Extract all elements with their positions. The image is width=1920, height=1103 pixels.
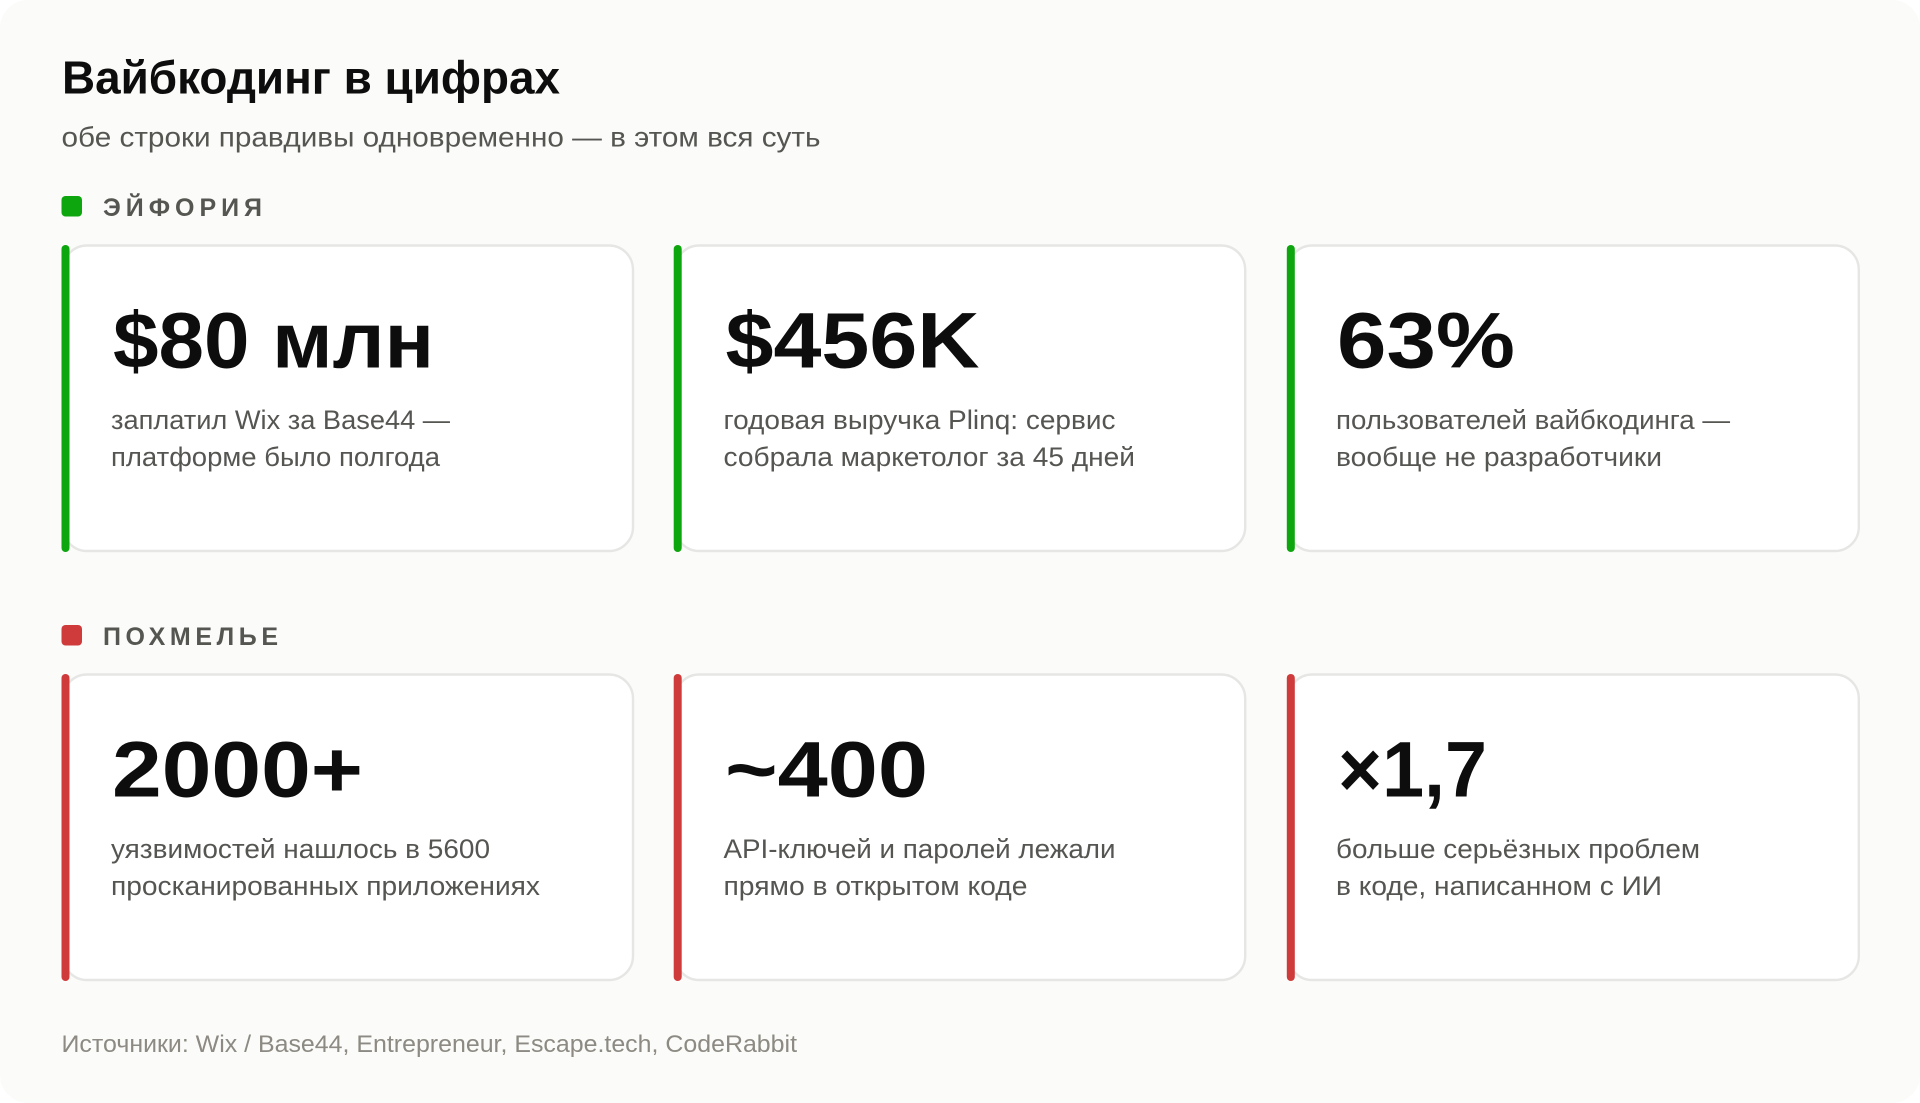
card: 2000+	[62, 674, 633, 981]
card: 63%	[1287, 245, 1859, 552]
card: $456K: собрала маркетолог за 45 дней	[724, 442, 1135, 472]
card: $80 million: платформе было полгода	[111, 442, 441, 472]
card: 63%: 63%	[1337, 296, 1515, 384]
section: hangover	[62, 623, 1859, 981]
card: $456K	[674, 245, 1245, 552]
card: ~400: прямо в открытом коде	[724, 871, 1028, 901]
section heading: euphoria: ЭЙФОРИЯ	[103, 192, 262, 222]
card: 2000+: просканированных приложениях	[111, 871, 541, 901]
card: 2000+: уязвимостей нашлось в 5600	[111, 834, 490, 864]
subtitle: обе строки правдивы одновременно — в этом вся суть	[62, 122, 820, 152]
card: ~400: ~400	[725, 724, 928, 814]
card: 63%: вообще не разработчики	[1336, 442, 1662, 472]
card: $80 million	[62, 245, 633, 552]
card: ~400: API-ключей и паролей лежали	[724, 834, 1116, 864]
sources footnote: Источники: Wix / Base44, Entrepreneur, Escape.tech, CodeRabbit	[62, 1031, 797, 1058]
card: $80 million: заплатил Wix за Base44 —	[111, 405, 450, 435]
card: $80 million: $80 млн	[113, 296, 434, 384]
card: ~400	[674, 674, 1245, 981]
icon: red square	[62, 625, 82, 646]
section heading: hangover: ПОХМЕЛЬЕ	[103, 623, 278, 651]
title: Вайбкодинг в цифрах	[62, 52, 560, 104]
card: x1.7	[1287, 674, 1859, 981]
card: x1.7: в коде, написанном с ИИ	[1336, 871, 1662, 901]
card: x1.7: ×1,7	[1338, 724, 1487, 814]
card: 2000+: 2000+	[112, 724, 363, 814]
section: euphoria	[62, 192, 1859, 552]
card: 63%: пользователей вайбкодинга —	[1336, 405, 1730, 435]
card: $456K: $456K	[726, 296, 980, 384]
icon: green square	[62, 196, 82, 216]
card: $456K: годовая выручка Plinq: сервис	[724, 405, 1116, 435]
card: x1.7: больше серьёзных проблем	[1336, 834, 1700, 864]
